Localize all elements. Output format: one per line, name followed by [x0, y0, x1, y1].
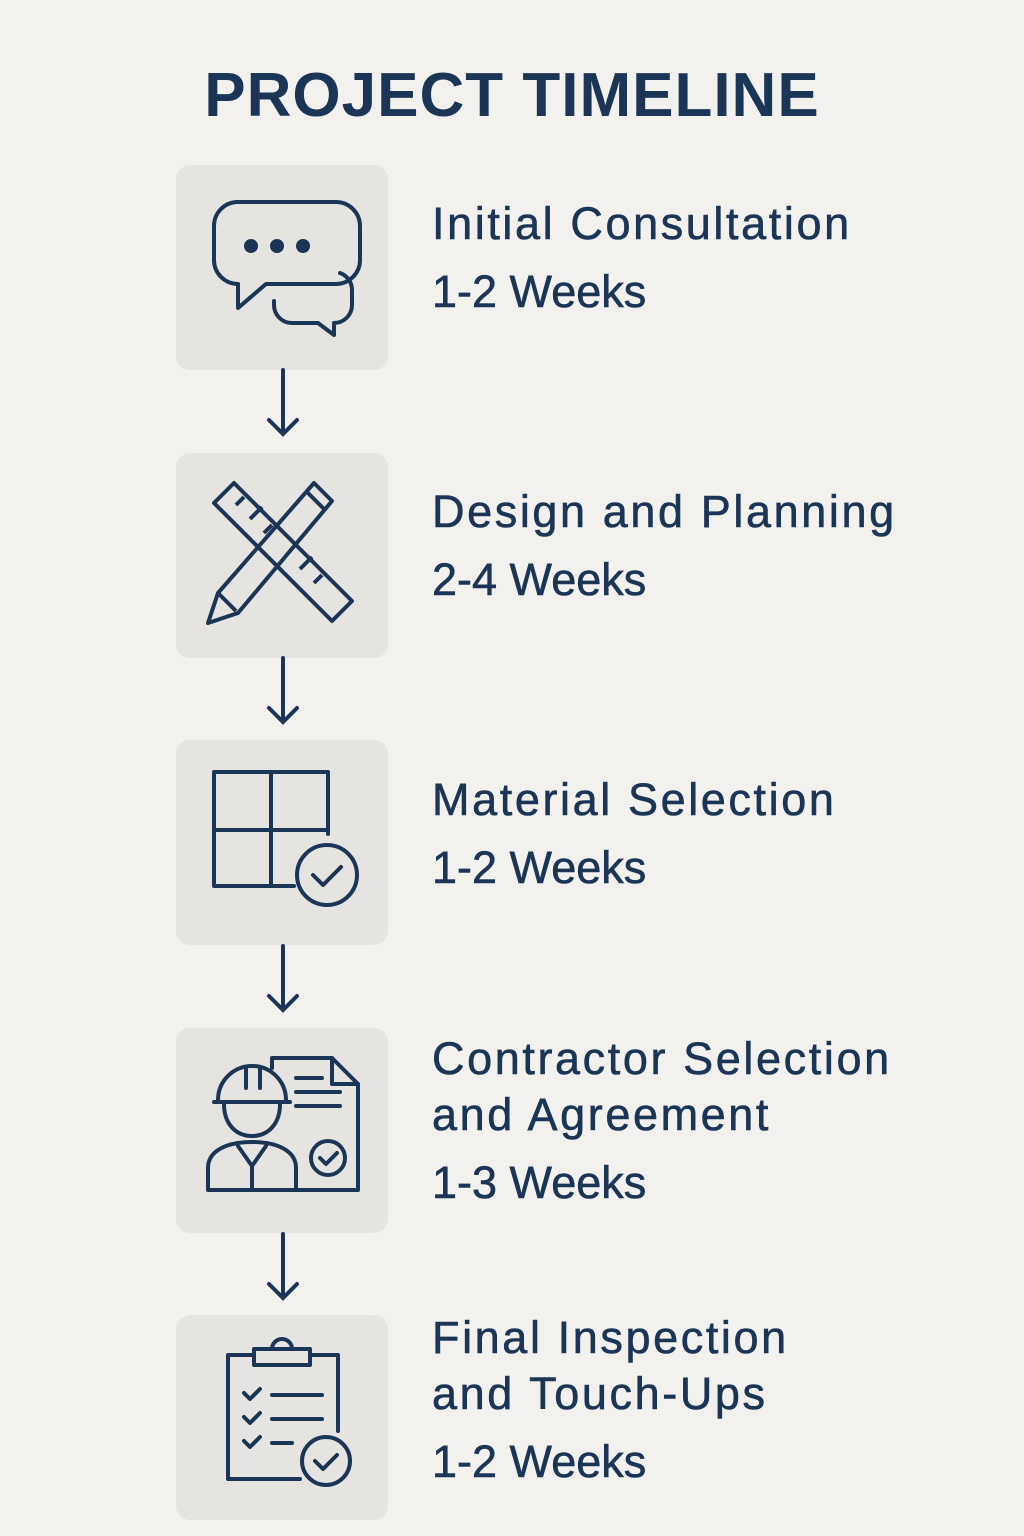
arrow 3 [266, 944, 300, 1013]
step 2 text: Design and Planning [432, 486, 897, 537]
step 4 text: 1-3 Weeks [432, 1157, 646, 1208]
step 2 icon: ruler and pencil [176, 453, 388, 658]
step 5 icon: clipboard checklist [176, 1315, 388, 1520]
step 3 text: Material Selection [432, 774, 836, 825]
step 5 text: 1-2 Weeks [432, 1436, 646, 1487]
step 4 text: and Agreement [432, 1089, 771, 1140]
step 5 text: Final Inspection [432, 1312, 789, 1363]
step 4 text: Contractor Selection [432, 1033, 892, 1084]
arrow 2 [266, 656, 300, 725]
step 2 text: 2-4 Weeks [432, 554, 646, 605]
step 3 icon: tiles with check [176, 740, 388, 945]
step 3 text [432, 774, 836, 893]
step 1 text: Initial Consultation [432, 198, 852, 249]
title: PROJECT TIMELINE [204, 61, 820, 130]
step 3 text: 1-2 Weeks [432, 842, 646, 893]
step 4 text [432, 1033, 892, 1208]
arrow 1 [266, 368, 300, 437]
step 2 text [432, 486, 897, 605]
step 1 text: 1-2 Weeks [432, 266, 646, 317]
step 5 text [432, 1312, 789, 1487]
step 1 icon: chat bubbles [176, 165, 388, 370]
arrow 4 [266, 1232, 300, 1301]
step 1 text [432, 198, 852, 317]
step 5 text: and Touch-Ups [432, 1368, 768, 1419]
step 4 icon: contractor and contract [176, 1028, 388, 1233]
